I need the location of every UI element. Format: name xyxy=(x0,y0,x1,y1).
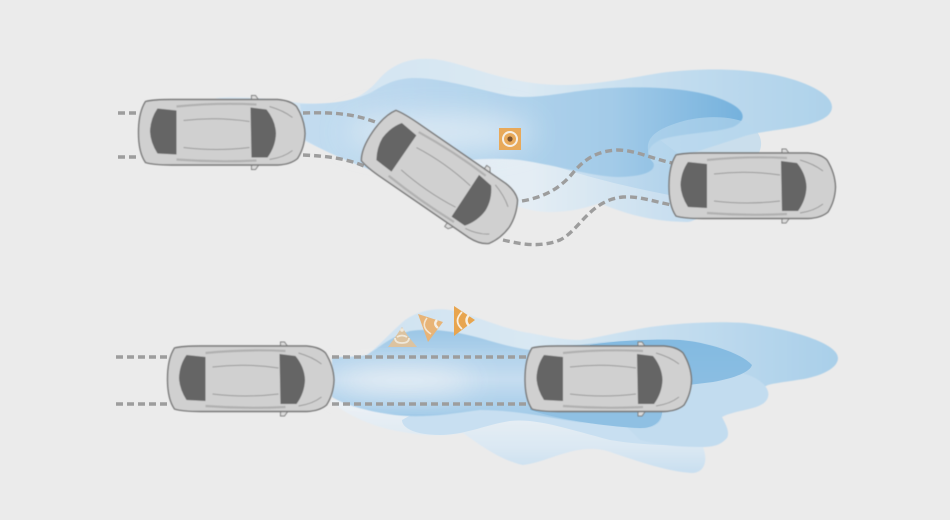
icon: traffic cone, tilted xyxy=(418,314,443,342)
icon: traffic cone, sideways xyxy=(454,306,475,336)
sensor field: top lower pale area xyxy=(300,130,702,222)
icon: obstacle marker xyxy=(499,128,521,150)
car: bottom right xyxy=(525,342,692,416)
car: bottom left xyxy=(168,342,334,416)
car: top middle, swerving xyxy=(352,101,531,257)
icon: traffic cone, fallen far xyxy=(388,327,417,347)
sensor field: bottom lower left lump xyxy=(402,405,690,446)
sensor field: top pale glow xyxy=(345,114,535,150)
sensor field: bottom outer light blue xyxy=(367,309,838,420)
panel: top scenario, swerving around an obstacle xyxy=(118,59,836,257)
car: top left xyxy=(138,96,305,170)
sensor field: bottom darker blue xyxy=(590,340,752,386)
sensor field: top blue band toward right car xyxy=(555,140,700,197)
sensor field: top middle blue xyxy=(300,78,743,180)
sensor field: bottom pale right lobe xyxy=(600,367,768,447)
car: top right xyxy=(669,149,836,223)
sensor field: top outer light blue xyxy=(215,59,832,170)
sensor field: bottom lower blue under car xyxy=(530,405,662,428)
sensor field: bottom lower pale area xyxy=(330,400,720,473)
dashed path: top lane lines and swerve xyxy=(118,113,672,245)
sensor field: bottom middle blue xyxy=(332,330,752,428)
dashed path: bottom lane lines xyxy=(116,357,528,404)
sensor field: bottom glow xyxy=(335,370,475,392)
sensor field: top pale lobe xyxy=(648,117,761,165)
panel: bottom scenario, avoiding traffic cones xyxy=(116,306,838,473)
